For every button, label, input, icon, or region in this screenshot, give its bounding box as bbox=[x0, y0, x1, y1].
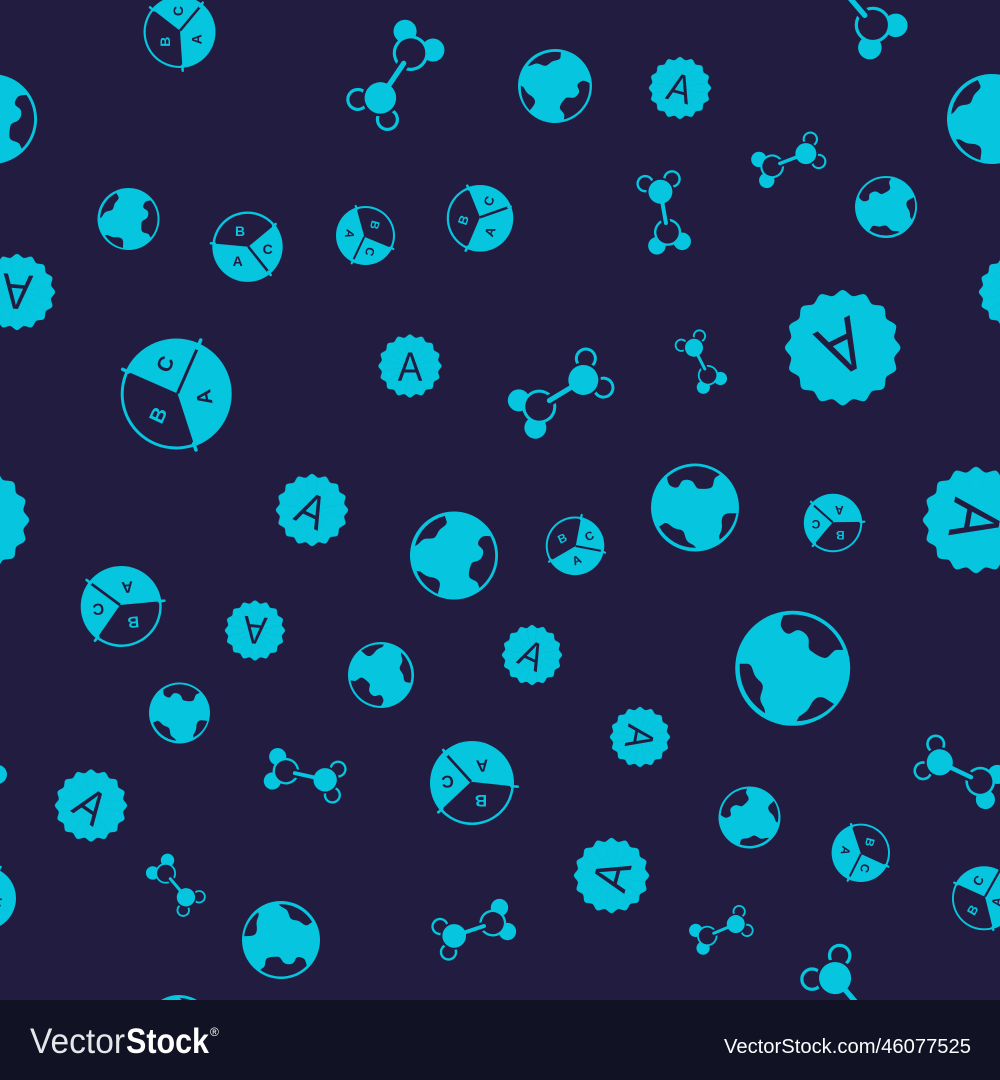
icon: badge A lower center right: A bbox=[616, 722, 664, 753]
icon: large pie chart: C bbox=[152, 353, 179, 376]
logo: VectorStock bbox=[30, 1022, 219, 1061]
icon: molecule upper right bbox=[749, 130, 827, 190]
icon: pie chart right edge: B bbox=[964, 902, 982, 918]
icon: badge A lower center right bbox=[610, 707, 670, 767]
icon: badge A center: A bbox=[398, 345, 422, 390]
icon: molecule lower left bbox=[262, 746, 347, 804]
icon: badge A lower center: A bbox=[512, 630, 552, 680]
icon: molecule bottom center bbox=[430, 897, 518, 962]
icon: pie chart left: C bbox=[91, 599, 105, 617]
icon: pie chart lower middle: C bbox=[441, 771, 455, 791]
icon: globe top center bbox=[515, 46, 595, 126]
icon: pie chart left: B bbox=[127, 612, 140, 630]
icon: badge A center bbox=[378, 334, 442, 398]
icon: molecule top right cut bbox=[799, 0, 912, 64]
icon: pie chart right edge: C bbox=[970, 872, 987, 889]
icon: badge A right large bbox=[923, 467, 1000, 573]
icon: globe lower center bbox=[343, 637, 419, 713]
icon: pie chart top left bbox=[144, 0, 216, 71]
icon: pie chart middle: A bbox=[570, 552, 584, 568]
icon: globe bottom bbox=[227, 886, 335, 994]
icon: badge A left edge lower bbox=[0, 467, 29, 573]
icon: molecule small bottom left bbox=[143, 851, 207, 919]
icon: molecule small center right bbox=[673, 328, 729, 396]
icon: pie chart top left: B bbox=[157, 37, 173, 47]
icon: badge A lower left: A bbox=[241, 607, 269, 654]
icon: pie chart middle bbox=[546, 515, 605, 575]
logo: VectorStock: ® bbox=[210, 1025, 219, 1039]
icon: large globe bbox=[735, 611, 850, 726]
icon: badge A bottom center bbox=[574, 838, 649, 913]
icon: large pie chart: B bbox=[145, 404, 172, 427]
icon: pie chart lower right: A bbox=[838, 845, 853, 857]
icon: badge A middle left: A bbox=[288, 482, 335, 540]
icon: pie chart top left: C bbox=[170, 6, 186, 16]
icon: badge A bottom left: A bbox=[64, 777, 117, 836]
icon: pie chart row 1 bbox=[211, 212, 283, 282]
icon: molecule bottom right cut bbox=[797, 941, 910, 1059]
icon: pie chart top left: A bbox=[189, 34, 205, 44]
icon: pie chart left edge fragment bbox=[0, 866, 16, 930]
icon: pie chart middle right bbox=[804, 494, 864, 552]
icon: pie chart left bbox=[81, 566, 164, 647]
icon: pie chart row 1 small: B bbox=[367, 219, 383, 231]
icon: molecule vertical bbox=[636, 170, 692, 256]
icon: badge A top: A bbox=[662, 65, 698, 114]
icon: globe upper right bbox=[844, 165, 928, 249]
icon: badge A left edge: A bbox=[0, 262, 34, 320]
icon: pie chart row 1 small: C bbox=[362, 246, 378, 258]
icon: pie chart lower right bbox=[832, 824, 890, 882]
icon: globe lower right bbox=[712, 780, 787, 855]
icon: pie chart middle: C bbox=[582, 528, 597, 544]
icon: molecule right edge bbox=[912, 733, 1000, 812]
icon: pie chart lower right: B bbox=[862, 836, 878, 849]
footer bar bbox=[0, 1000, 1000, 1080]
icon: pie chart right edge bbox=[952, 866, 1000, 930]
icon: molecule left edge fragment bbox=[0, 733, 10, 812]
icon: globe right edge bbox=[932, 59, 1000, 179]
icon: badge A bottom center: A bbox=[582, 854, 642, 897]
icon: globe lower left bbox=[139, 672, 220, 754]
icon: molecule center bbox=[504, 345, 617, 443]
icon: molecule small bottom bbox=[687, 904, 755, 957]
icon: pie chart left: A bbox=[120, 577, 134, 595]
icon: pie chart row 1: B bbox=[235, 223, 245, 239]
icon: globe cut by footer bbox=[131, 982, 227, 1078]
icon: globe upper left bbox=[86, 177, 171, 261]
icon: badge A top bbox=[649, 57, 711, 119]
icon: pie chart row 1: A bbox=[233, 253, 243, 269]
icon: badge A bottom left bbox=[55, 770, 127, 842]
icon: pie chart lower middle: A bbox=[475, 756, 489, 776]
icon: badge A left edge bbox=[0, 254, 55, 330]
icon: pie chart row 1 small: A bbox=[342, 228, 358, 240]
icon: pie chart row 1 right: A bbox=[481, 224, 499, 239]
icon: pie chart middle right: A bbox=[835, 503, 844, 517]
icon: large badge A bbox=[785, 290, 900, 405]
icon: globe center right bbox=[634, 447, 756, 568]
icon: badge A right edge bbox=[979, 254, 1000, 330]
icon: pie chart row 1 right: C bbox=[480, 193, 498, 208]
icon: pie chart lower middle: B bbox=[475, 791, 487, 810]
icon: molecule top bbox=[344, 15, 449, 134]
icon: badge A lower left bbox=[225, 600, 285, 660]
icon: pie chart row 1 right bbox=[447, 185, 513, 252]
icon: large pie chart bbox=[121, 338, 232, 450]
logo: VectorStock: Stock bbox=[126, 1022, 209, 1061]
image id text: VectorStock.com/46077525 bbox=[724, 1036, 971, 1058]
icon: large badge A: A bbox=[805, 301, 880, 394]
icon: pie chart row 1 right: B bbox=[455, 213, 472, 227]
icon: pie chart row 1 small bbox=[336, 206, 395, 265]
icon: pie chart row 1: C bbox=[263, 241, 273, 257]
icon: pie chart lower right: C bbox=[857, 862, 873, 875]
icon: badge A lower center bbox=[502, 625, 562, 685]
icon: pie chart middle right: C bbox=[811, 517, 820, 531]
icon: badge A middle left bbox=[276, 474, 348, 546]
icon: globe left edge bbox=[0, 59, 52, 179]
icon: pie chart middle right: B bbox=[836, 528, 845, 542]
icon: globe center bbox=[399, 500, 509, 611]
icon: large pie chart: A bbox=[192, 388, 217, 407]
icon: pie chart lower middle bbox=[430, 741, 518, 825]
logo: VectorStock: Vector bbox=[30, 1022, 125, 1061]
icon: pie chart middle: B bbox=[555, 530, 570, 547]
